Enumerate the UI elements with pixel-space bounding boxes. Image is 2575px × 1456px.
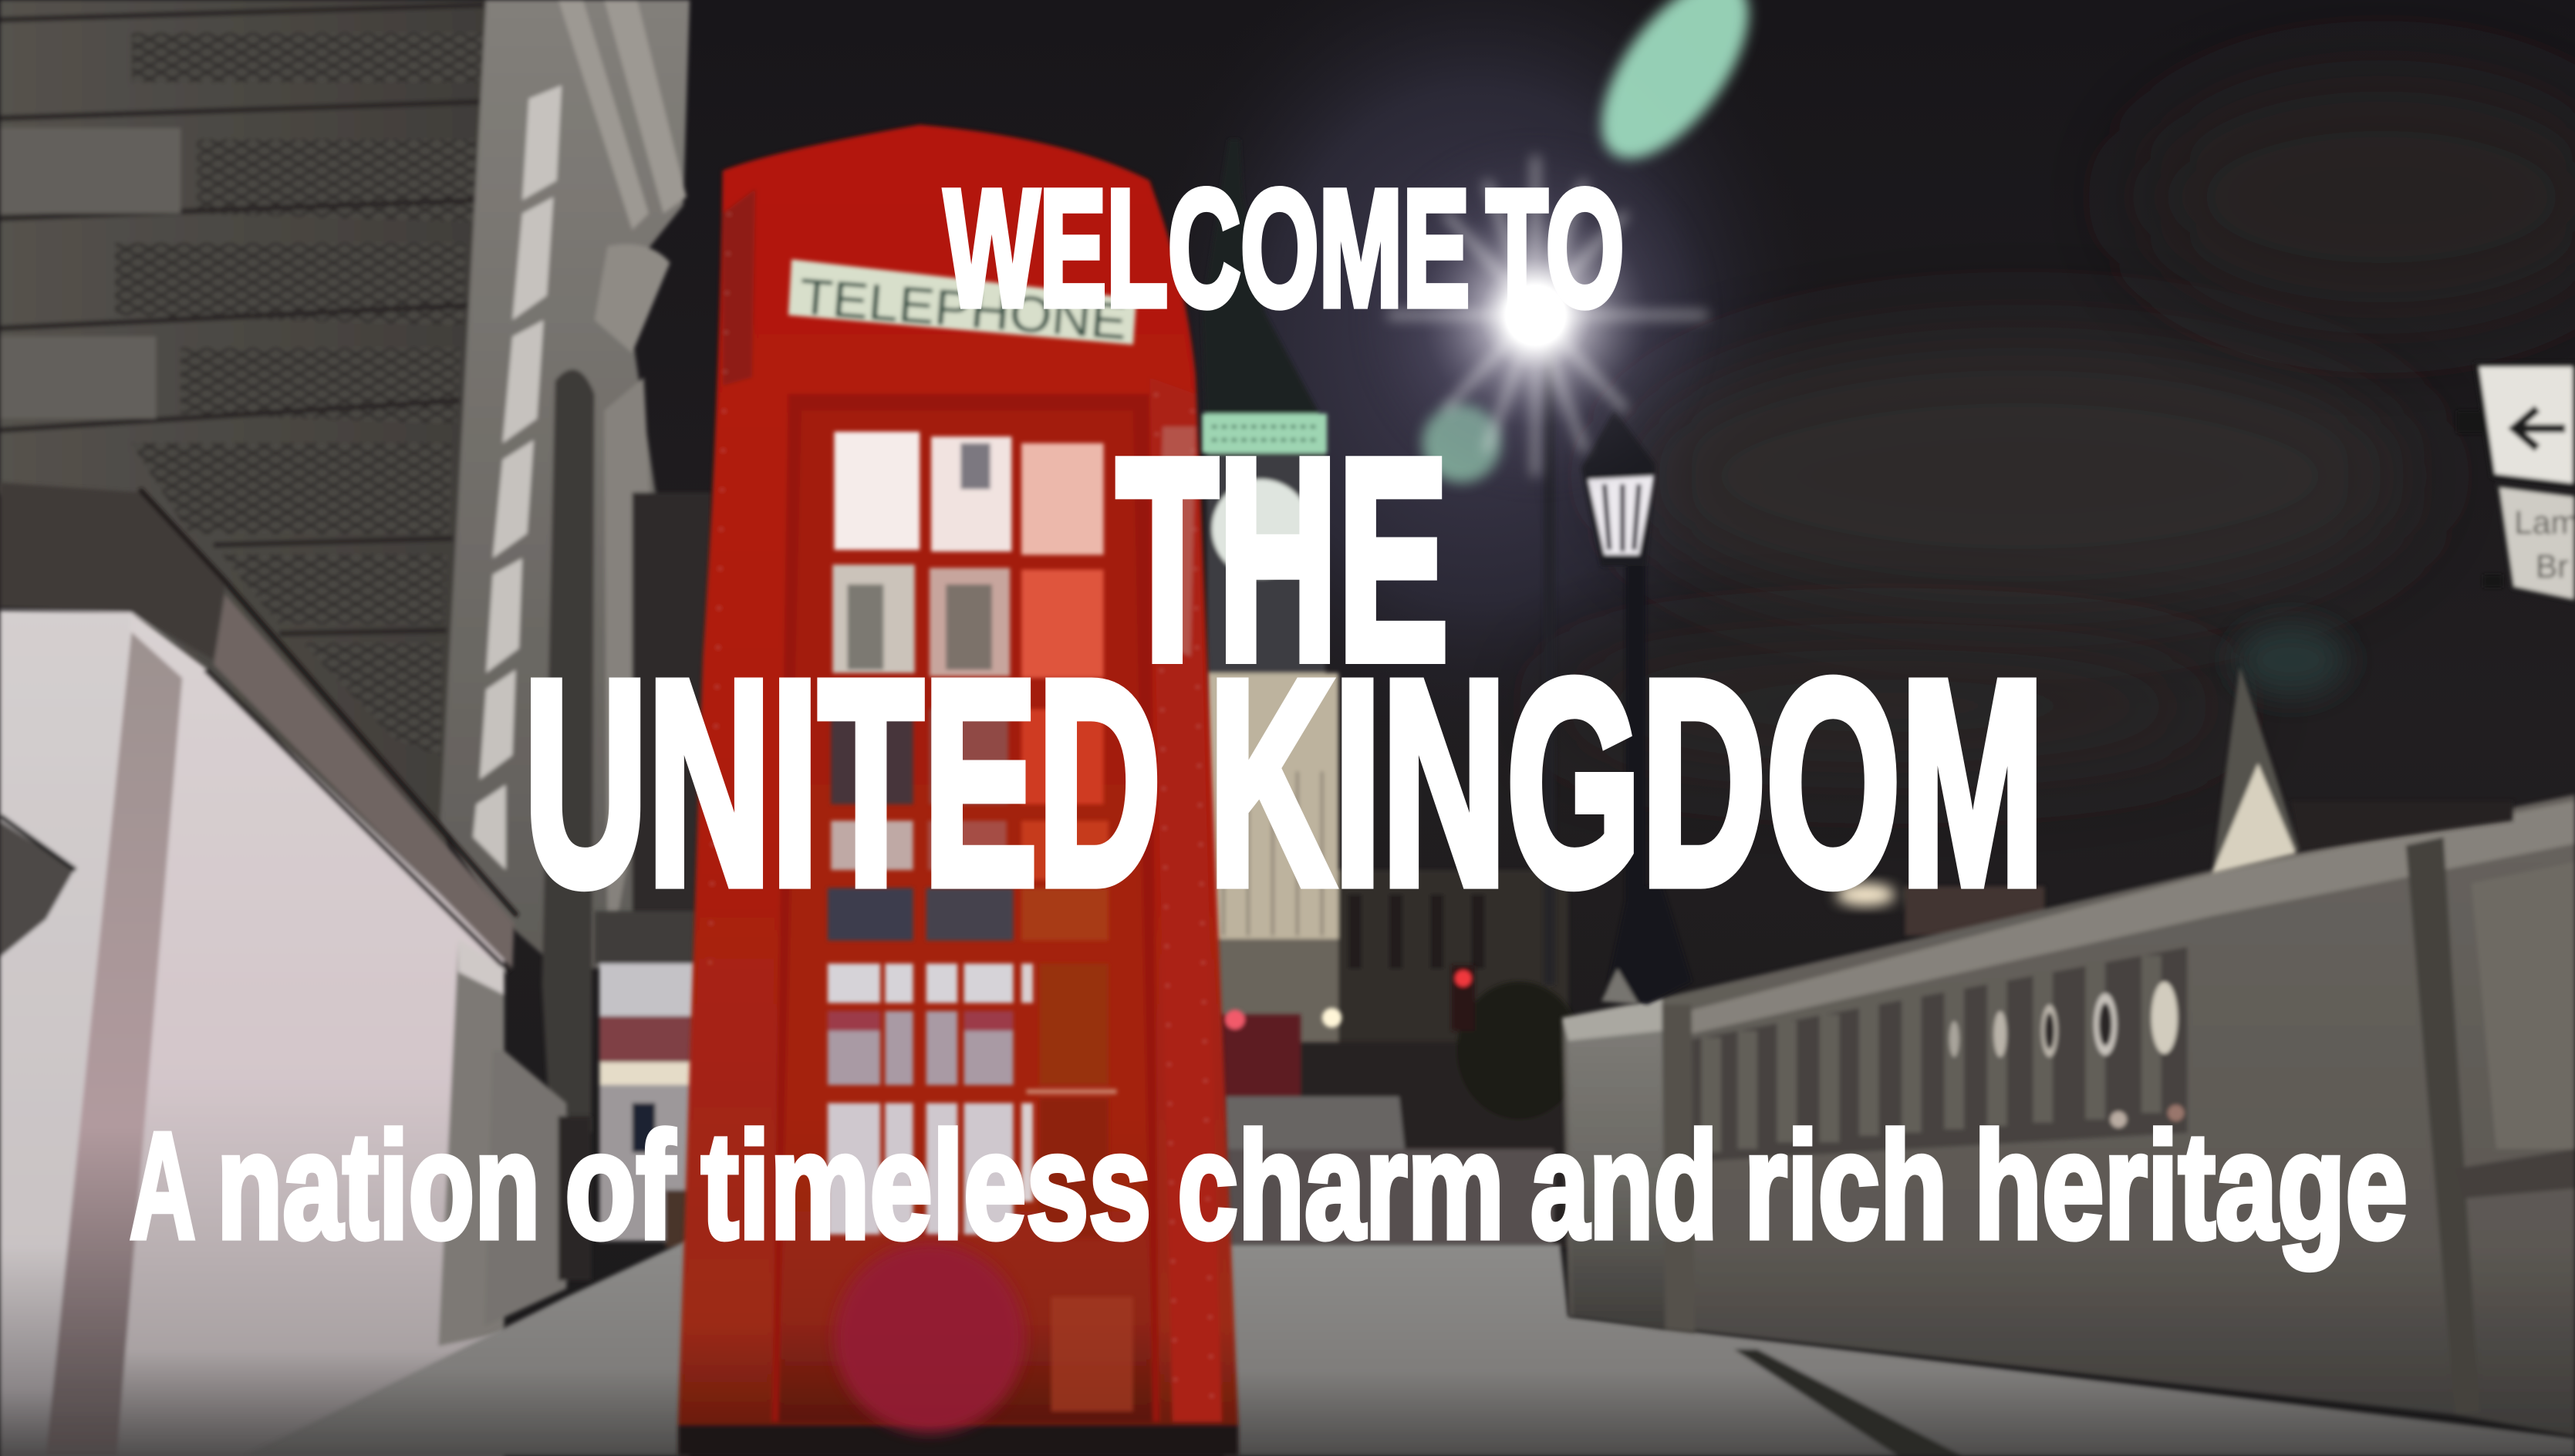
pavement (246, 1239, 2575, 1456)
subtitle tagline: nation (217, 1102, 540, 1270)
road sign: Br (2536, 548, 2568, 585)
lens flare on booth door (834, 1242, 1024, 1433)
road sign (2457, 365, 2575, 601)
green lens flares (1422, 0, 1777, 483)
red telephone booth (678, 125, 1238, 1456)
title: united kingdom: KINGDOM (1209, 620, 2044, 945)
subtitle tagline: A (130, 1102, 195, 1270)
title: the: THE (1117, 401, 1449, 720)
subtitle tagline: charm (1177, 1102, 1504, 1270)
subtitle tagline (130, 1102, 2408, 1270)
lower panes (828, 963, 1033, 1235)
title: welcome to: TO (1487, 155, 1624, 341)
subtitle tagline: rich (1744, 1102, 1948, 1270)
distant church spire (2212, 666, 2513, 873)
booth body (678, 125, 1238, 1456)
subtitle tagline: of (565, 1102, 676, 1270)
balusters (1711, 956, 2184, 1152)
lamp flare (1347, 0, 1777, 504)
street and background traffic (1219, 345, 2044, 1248)
subtitle tagline: heritage (1974, 1102, 2408, 1270)
Big Ben tower (1202, 140, 1568, 1054)
title: united kingdom: UNITED (524, 620, 1161, 945)
stone column (440, 0, 690, 969)
title: welcome to: WELCOME (944, 155, 1470, 341)
stone bridge balustrade (1562, 794, 2575, 1436)
booth window panes (828, 432, 1133, 1412)
subtitle tagline: timeless (701, 1102, 1151, 1270)
subtitle tagline: and (1530, 1102, 1718, 1270)
red double-decker bus behind booth (595, 911, 698, 1248)
white lower wall with ledge (0, 483, 591, 1456)
starburst light (1347, 126, 1724, 504)
street lamp (1581, 410, 1692, 1005)
ornamental facade bands (0, 5, 484, 755)
left stone building (0, 0, 711, 1133)
telephone sign: TELEPHONE (798, 268, 1129, 350)
